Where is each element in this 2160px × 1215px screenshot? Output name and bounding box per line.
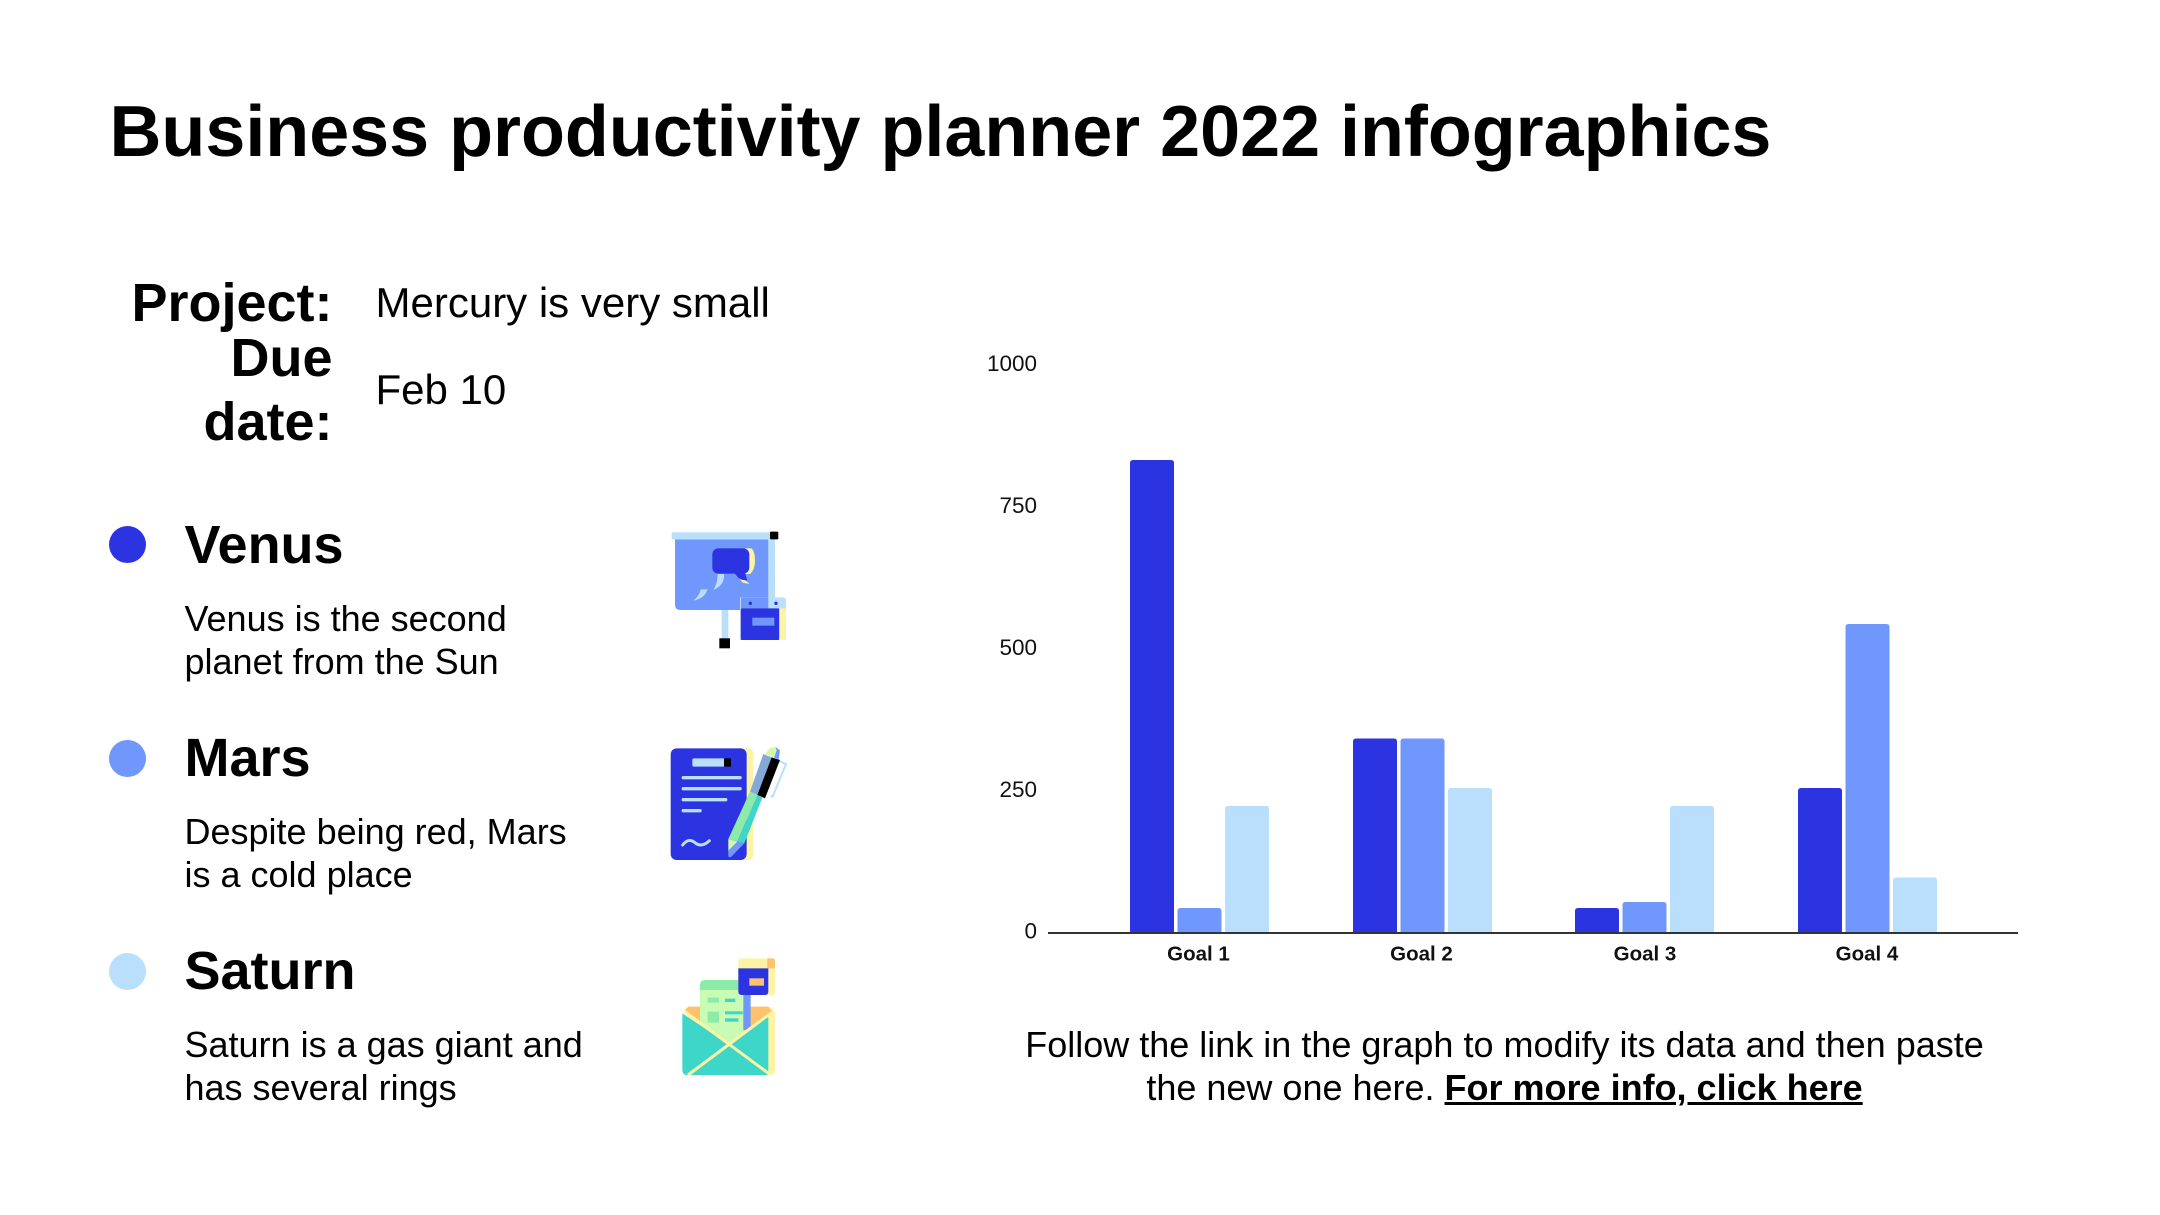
bars: Goal 4 <box>1798 624 1937 933</box>
project label: Project: <box>131 272 332 332</box>
text: Venus: planet from the Sun <box>184 641 499 682</box>
legend dot: Saturn <box>108 953 146 990</box>
x axis line <box>1048 932 2018 934</box>
y axis labels: 750 <box>999 493 1037 518</box>
text: Saturn <box>184 1024 583 1108</box>
icon: presentation board <box>672 532 786 648</box>
legend dot: Mars <box>108 740 146 776</box>
x axis labels: Goal 3 <box>1614 942 1676 966</box>
heading: Saturn: Saturn <box>184 941 356 1001</box>
bars: Goal 3 <box>1575 806 1714 933</box>
text: Saturn: Saturn is a gas giant and <box>184 1024 583 1065</box>
icon: envelope <box>682 958 775 1075</box>
due date label: Due <box>230 328 332 388</box>
bars: Goal 2 <box>1353 738 1492 933</box>
x axis labels <box>1167 942 1899 966</box>
due date value: Feb 10 <box>376 366 506 412</box>
text: Saturn: has several rings <box>184 1067 457 1108</box>
y axis labels: 1000 <box>987 351 1037 376</box>
y axis labels: 250 <box>999 777 1037 802</box>
legend dot: Venus <box>108 526 146 563</box>
due date label <box>203 328 332 452</box>
y axis labels: 0 <box>1024 918 1037 944</box>
y axis labels: 500 <box>999 635 1037 660</box>
icon: document and pen <box>671 747 786 860</box>
chart note <box>1025 1024 1984 1108</box>
text: Mars: is a cold place <box>184 854 413 895</box>
project value: Mercury is very small <box>376 278 770 326</box>
y axis labels <box>987 351 1037 944</box>
chart note: the new one here. For more info, click here <box>1146 1067 1863 1108</box>
bar chart <box>987 351 2018 966</box>
title: Business productivity planner 2022 infographics <box>110 92 1771 172</box>
x axis labels: Goal 1 <box>1167 942 1230 966</box>
bars: Goal 1 <box>1130 460 1269 933</box>
x axis labels: Goal 2 <box>1390 942 1453 966</box>
chart note: Follow the link in the graph to modify its data and then paste <box>1025 1024 1984 1065</box>
heading: Mars: Mars <box>184 728 311 788</box>
heading: Venus: Venus <box>184 515 344 575</box>
text: Venus: Venus is the second <box>184 598 507 639</box>
due date label: date: <box>203 392 332 452</box>
x axis labels: Goal 4 <box>1836 942 1899 966</box>
text: Mars: Despite being red, Mars <box>184 811 567 852</box>
text: Venus <box>184 598 507 682</box>
text: Mars <box>184 811 567 895</box>
